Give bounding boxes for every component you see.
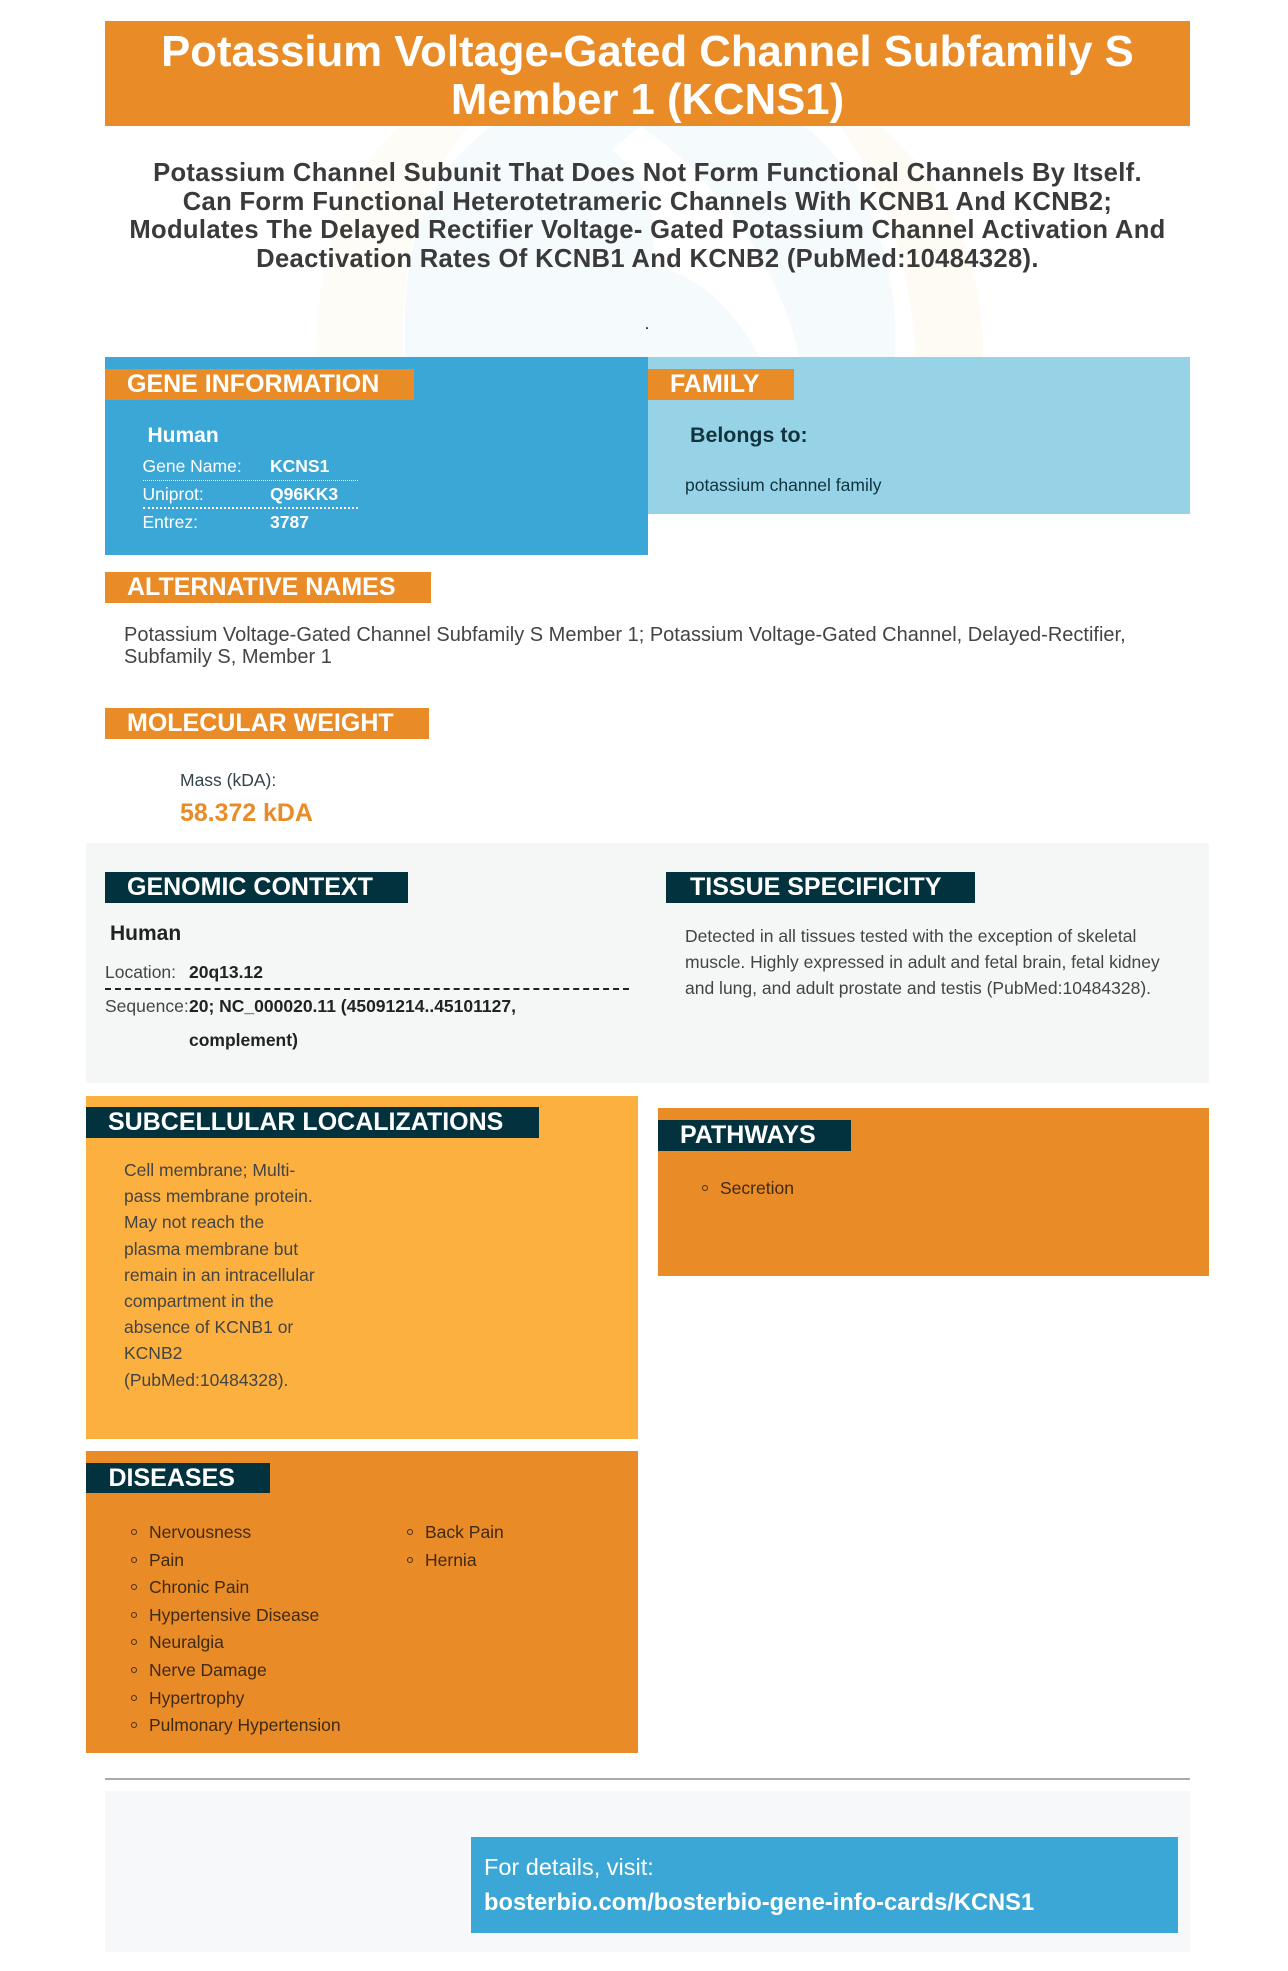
disease list left column: Pulmonary Hypertension <box>149 1715 341 1735</box>
tissue specificity text: Detected in all tissues tested with the exception of skeletal <box>685 926 1136 946</box>
disease list right column: Back Pain <box>425 1522 504 1542</box>
heading: gene information: GENE INFORMATION <box>127 370 379 398</box>
tissue specificity text: muscle. Highly expressed in adult and fetal brain, fetal kidney <box>685 952 1160 972</box>
callout: details link <box>471 1837 1178 1933</box>
entrez row: Entrez: <box>142 512 198 532</box>
sequence row <box>105 996 516 1050</box>
panel: genomic context and tissue specificity: 20q13.12 <box>189 962 263 982</box>
heading: tissue specificity: TISSUE SPECIFICITY <box>690 873 941 901</box>
panel: pathways <box>658 1108 1209 1276</box>
disease list left column <box>131 1522 341 1735</box>
species label: Human <box>110 922 181 945</box>
sequence row: 20; NC_000020.11 (45091214..45101127, <box>189 996 516 1016</box>
uniprot row: Uniprot: <box>142 484 204 504</box>
entrez row: 3787 <box>270 512 309 532</box>
disease list left column: Hypertrophy <box>149 1688 244 1708</box>
details url: bosterbio.com/bosterbio-gene-info-cards/KCNS1 <box>484 1890 1034 1916</box>
subcellular localization text <box>124 1160 315 1390</box>
location row: Location: <box>105 962 176 982</box>
mass label: Mass (kDA): <box>180 770 276 790</box>
panel: genomic context and tissue specificity <box>86 843 1209 1083</box>
panel: gene information <box>105 357 648 555</box>
alternative names text: Potassium Voltage-Gated Channel Subfamily S Member 1; Potassium Voltage-Gated Channel, Delayed-Rectifier, <box>124 624 1126 646</box>
panel: subcellular localizations <box>86 1096 638 1439</box>
subtitle description: Modulates The Delayed Rectifier Voltage- Gated Potassium Channel Activation And <box>129 216 1166 244</box>
location row <box>105 962 263 982</box>
heading: family: FAMILY <box>670 370 759 398</box>
mass value: 58.372 kDA <box>180 799 313 827</box>
tissue specificity text <box>685 926 1160 998</box>
subcellular localization text: remain in an intracellular <box>124 1265 315 1285</box>
subcellular localization text: absence of KCNB1 or <box>124 1317 293 1337</box>
subtitle description: Can Form Functional Heterotetrameric Channels With KCNB1 And KCNB2; <box>183 188 1112 216</box>
panel: diseases <box>86 1451 638 1753</box>
details label: For details, visit: <box>484 1854 654 1880</box>
disease list left column: Chronic Pain <box>149 1577 249 1597</box>
disease list left column: Nervousness <box>149 1522 251 1542</box>
heading: pathways <box>658 1120 851 1151</box>
disease list left column: Hypertensive Disease <box>149 1605 319 1625</box>
disease list right column: Hernia <box>425 1550 477 1570</box>
heading: diseases <box>86 1463 270 1493</box>
alternative names text <box>124 624 1126 668</box>
subtitle description: Deactivation Rates Of KCNB1 And KCNB2 (PubMed:10484328). <box>256 245 1039 273</box>
species label: Human <box>148 424 219 447</box>
background watermark logo <box>316 126 983 357</box>
gene name row: KCNS1 <box>270 456 329 476</box>
family value: potassium channel family <box>685 475 881 495</box>
gene name row: Gene Name: <box>142 456 242 476</box>
heading: subcellular localizations: SUBCELLULAR LOCALIZATIONS <box>108 1108 503 1136</box>
alternative names text: Subfamily S, Member 1 <box>124 646 332 668</box>
panel: footer <box>105 1791 1190 1952</box>
title banner: Potassium Voltage-Gated Channel Subfamily S <box>161 27 1134 76</box>
dashed divider <box>105 988 629 990</box>
heading: pathways: PATHWAYS <box>680 1121 816 1149</box>
subtitle description: Potassium Channel Subunit That Does Not Form Functional Channels By Itself. <box>153 159 1142 187</box>
pathway item: Secretion <box>720 1178 794 1198</box>
dot note: . <box>645 314 649 333</box>
heading: molecular weight: MOLECULAR WEIGHT <box>127 709 394 737</box>
entrez row <box>142 512 309 532</box>
belongs to label: Belongs to: <box>690 423 808 447</box>
subcellular localization text: Cell membrane; Multi- <box>124 1160 295 1180</box>
subcellular localization text: compartment in the <box>124 1291 274 1311</box>
subcellular localization text: KCNB2 <box>124 1343 182 1363</box>
sequence row: complement) <box>189 1030 298 1050</box>
disease list left column: Neuralgia <box>149 1632 224 1652</box>
tissue specificity text: and lung, and adult prostate and testis (PubMed:10484328). <box>685 978 1151 998</box>
heading: diseases: DISEASES <box>108 1464 235 1492</box>
heading: genomic context: GENOMIC CONTEXT <box>127 873 373 901</box>
disease list left column: Nerve Damage <box>149 1660 267 1680</box>
panel: family <box>648 357 1190 514</box>
disease list left column: Pain <box>149 1550 184 1570</box>
divider <box>105 1778 1190 1780</box>
title banner: Member 1 (KCNS1) <box>451 75 844 124</box>
subtitle description <box>129 159 1166 273</box>
subcellular localization text: May not reach the <box>124 1212 264 1232</box>
uniprot row: Q96KK3 <box>270 484 338 504</box>
subcellular localization text: pass membrane protein. <box>124 1186 313 1206</box>
heading: alternative names: ALTERNATIVE NAMES <box>127 573 396 601</box>
heading: family <box>648 369 794 400</box>
subcellular localization text: plasma membrane but <box>124 1239 298 1259</box>
disease list right column <box>407 1522 504 1570</box>
uniprot row <box>142 481 358 509</box>
subcellular localization text: (PubMed:10484328). <box>124 1370 288 1390</box>
title banner <box>105 21 1190 126</box>
sequence row: Sequence: <box>105 996 189 1016</box>
gene name row <box>142 453 358 481</box>
